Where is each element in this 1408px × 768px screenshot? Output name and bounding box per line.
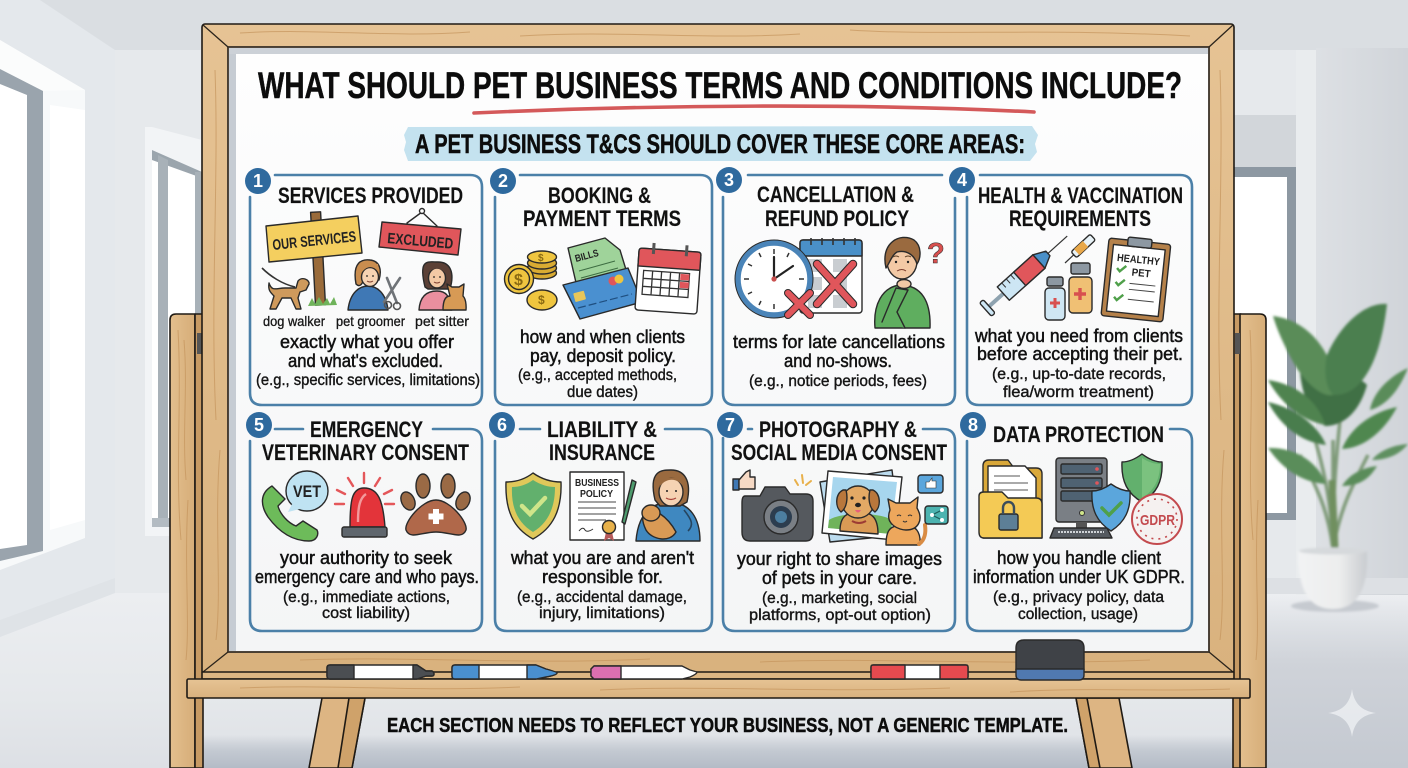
description: exactly what you offer	[280, 332, 454, 352]
icon: clock	[735, 240, 813, 318]
panel: services provided	[245, 168, 482, 405]
heading: CANCELLATION &	[757, 182, 914, 207]
panel: emergency veterinary consent	[246, 412, 482, 631]
description: platforms, opt-out option)	[749, 607, 931, 624]
description	[256, 332, 480, 389]
description: (e.g., specific services, limitations)	[256, 372, 480, 389]
icon: vials	[1045, 263, 1092, 320]
badge 5: 5	[254, 415, 264, 435]
subtitle with highlight	[404, 126, 1038, 161]
heading: BOOKING &	[548, 183, 651, 208]
icon: cancelled calendar	[800, 238, 862, 313]
description: terms for late cancellations	[733, 332, 945, 352]
red marker	[871, 665, 968, 679]
icon: GDPR stamp: GDPR	[1140, 512, 1175, 529]
icon: excluded sign: EXCLUDED	[387, 230, 454, 253]
description	[255, 548, 479, 622]
heading	[731, 417, 947, 465]
description: (e.g., marketing, social	[762, 590, 917, 607]
icon: business policy document: POLICY	[580, 488, 613, 500]
description: due dates)	[567, 384, 638, 401]
icon: vet speech bubble: VET	[293, 482, 322, 501]
icon: orange cat	[886, 497, 925, 545]
icon: coins: $	[514, 272, 523, 289]
description: (e.g., up-to-date records,	[992, 366, 1166, 383]
panel: cancellation and refund policy	[716, 167, 955, 405]
icon: thumbs up	[733, 470, 755, 490]
badge 3	[716, 167, 742, 193]
description: what you need from clients	[974, 326, 1183, 346]
description: pay, deposit policy.	[530, 346, 676, 366]
panel: liability and insurance	[489, 412, 712, 631]
description: injury, limitations)	[539, 605, 665, 622]
description: collection, usage)	[1018, 606, 1138, 623]
icon: vet speech bubble	[286, 471, 328, 512]
icon: our services sign	[266, 212, 362, 306]
description: of pets in your care.	[762, 568, 917, 588]
badge 5	[246, 412, 272, 438]
description: (e.g., notice periods, fees)	[749, 373, 927, 390]
icon: secure folder	[979, 460, 1042, 538]
icon: business policy document	[570, 472, 636, 541]
heading: VETERINARY CONSENT	[262, 440, 469, 465]
easel lower legs	[309, 698, 1132, 768]
footer note: EACH SECTION NEEDS TO REFLECT YOUR BUSINESS, NOT A GENERIC TEMPLATE.	[387, 714, 1068, 737]
heading: HEALTH & VACCINATION	[978, 183, 1183, 208]
icon: bills: BILLS	[574, 248, 600, 265]
pink marker	[591, 666, 697, 679]
description: emergency care and who pays.	[255, 567, 479, 587]
icon: social badges	[918, 475, 948, 524]
icon: pet photos	[820, 470, 902, 542]
icon: business policy document: BUSINESS	[575, 477, 619, 489]
heading	[978, 183, 1183, 231]
badge 1	[245, 168, 271, 194]
description	[737, 549, 942, 624]
icon: excluded sign	[379, 208, 461, 255]
badge 8: 8	[968, 415, 978, 435]
icon: confused person: ?	[927, 238, 945, 270]
badge 1: 1	[253, 171, 263, 191]
icon: pet sitter and cat	[419, 262, 466, 310]
description: and what's excluded.	[288, 351, 443, 371]
heading	[757, 182, 914, 231]
description	[974, 326, 1183, 401]
description: responsible for.	[542, 567, 663, 587]
service labels: dog walker	[263, 313, 325, 329]
icon: shield	[506, 473, 561, 539]
icon: red siren	[335, 473, 394, 537]
icon: dog on leash	[262, 268, 309, 309]
heading: LIABILITY &	[547, 417, 657, 442]
panel: data protection	[960, 412, 1192, 631]
easel left post	[170, 314, 203, 768]
black marker	[327, 665, 434, 679]
description: before accepting their pet.	[977, 344, 1183, 364]
icon: bills	[568, 238, 627, 287]
badge 7: 7	[725, 415, 735, 435]
heading: DATA PROTECTION	[993, 422, 1164, 447]
whiteboard wooden frame	[202, 24, 1234, 674]
badge 4	[949, 167, 975, 193]
heading	[262, 417, 469, 465]
description	[973, 548, 1185, 623]
subtitle with highlight: A PET BUSINESS T&CS SHOULD COVER THESE CORE AREAS:	[415, 129, 1025, 159]
icon: confused person	[875, 237, 945, 328]
badge 2: 2	[498, 171, 508, 191]
icon: healthy pet clipboard: HEALTHY	[1116, 252, 1160, 268]
icon: vet with dog	[636, 470, 700, 541]
description: (e.g., accepted methods,	[518, 367, 677, 384]
description: what you are and aren't	[510, 548, 694, 568]
badge 6	[489, 412, 515, 438]
icon: syringes	[979, 229, 1096, 316]
icon: phone	[262, 486, 318, 541]
description: (e.g., privacy policy, data	[993, 589, 1164, 606]
icon: coins: $	[538, 293, 545, 307]
description: and no-shows.	[784, 351, 892, 371]
description	[733, 332, 945, 390]
description: how you handle client	[997, 548, 1161, 568]
blue marker	[452, 665, 557, 679]
badge 6: 6	[497, 415, 507, 435]
icon: blue shield	[1092, 484, 1130, 531]
heading: PHOTOGRAPHY &	[759, 417, 917, 442]
easel right post	[1233, 314, 1266, 768]
heading: SERVICES PROVIDED	[278, 183, 463, 208]
description: information under UK GDPR.	[973, 567, 1185, 587]
potted plant	[1268, 304, 1408, 612]
icon: server	[1050, 458, 1112, 538]
description: (e.g., accidental damage,	[517, 589, 687, 606]
badge 8	[960, 412, 986, 438]
heading: REQUIREMENTS	[1009, 206, 1151, 231]
icon: credit card	[563, 268, 642, 319]
heading: REFUND POLICY	[765, 206, 909, 231]
description: cost liability)	[322, 605, 410, 622]
marker tray	[187, 672, 1250, 698]
badge 4: 4	[957, 170, 967, 190]
icon: our services sign: OUR SERVICES	[272, 228, 357, 254]
service labels: pet groomer	[336, 313, 405, 329]
heading	[547, 417, 657, 465]
icon: sparkle watermark	[1328, 689, 1376, 737]
heading: EMERGENCY	[310, 417, 423, 442]
heading: SOCIAL MEDIA CONSENT	[731, 440, 947, 465]
icon: healthy pet clipboard	[1101, 235, 1171, 322]
icon: pet groomer	[348, 260, 400, 310]
icon: coins: $	[538, 253, 544, 264]
description: (e.g., immediate actions,	[283, 589, 450, 606]
icon: calendar	[635, 242, 702, 314]
description: flea/worm treatment)	[1003, 384, 1154, 401]
icon: paw with cross	[398, 474, 473, 535]
description: your authority to seek	[280, 548, 453, 568]
icon: green shield	[1122, 454, 1162, 502]
description	[510, 548, 694, 622]
badge 2	[490, 168, 516, 194]
description: your right to share images	[737, 549, 942, 569]
icon: healthy pet clipboard: PET	[1131, 267, 1152, 281]
panel: health and vaccination requirements	[949, 167, 1192, 405]
heading: INSURANCE	[549, 440, 655, 465]
icon: camera	[742, 475, 813, 541]
icon: GDPR stamp	[1132, 494, 1182, 544]
icon: coins	[504, 251, 557, 310]
panel: photography and social media consent	[717, 412, 955, 631]
service labels	[263, 313, 469, 329]
service labels: pet sitter	[415, 313, 469, 329]
heading	[523, 183, 681, 231]
eraser	[1016, 640, 1084, 680]
badge 3: 3	[724, 170, 734, 190]
heading: PAYMENT TERMS	[523, 206, 681, 231]
badge 7	[717, 412, 743, 438]
description: how and when clients	[520, 327, 685, 347]
panel: booking and payment terms	[490, 168, 712, 405]
description	[518, 327, 685, 401]
